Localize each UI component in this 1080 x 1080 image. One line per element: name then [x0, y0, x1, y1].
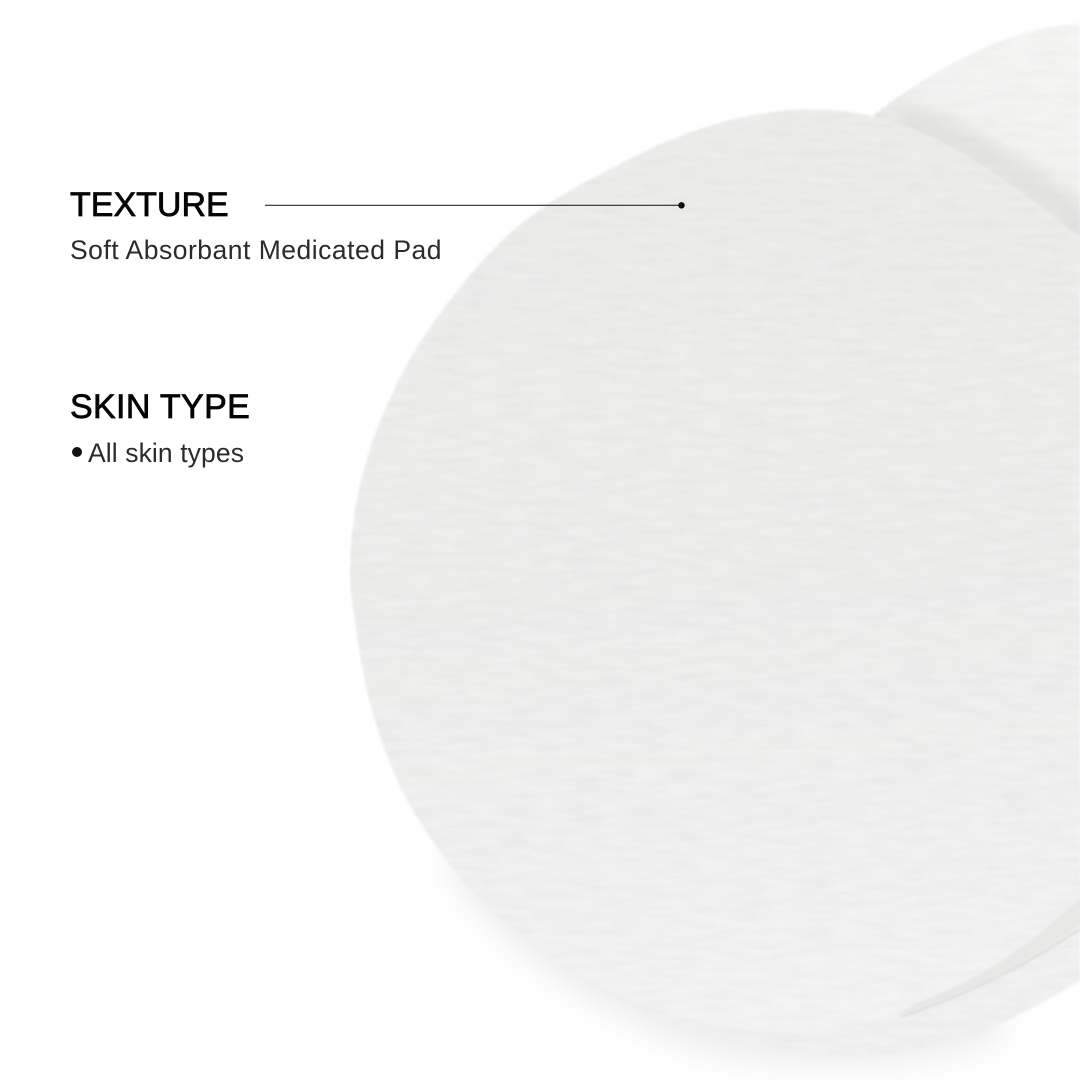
back pad, top right [873, 24, 1080, 320]
bullet dot [72, 447, 82, 457]
text: skin type item: All skin types [88, 438, 244, 468]
middle pad seam [900, 880, 1080, 1016]
callout line with dot [265, 202, 685, 208]
shadow between top pads [900, 112, 1080, 240]
heading: texture: TEXTURE [70, 186, 229, 224]
lower pad layer [560, 780, 1080, 1057]
main pad [350, 109, 1080, 1031]
text: texture description: Soft Absorbant Medicated Pad [70, 235, 442, 265]
soft shadow under pads [440, 800, 1000, 1065]
heading: skin type: SKIN TYPE [70, 388, 250, 426]
seam line [900, 920, 1080, 1017]
